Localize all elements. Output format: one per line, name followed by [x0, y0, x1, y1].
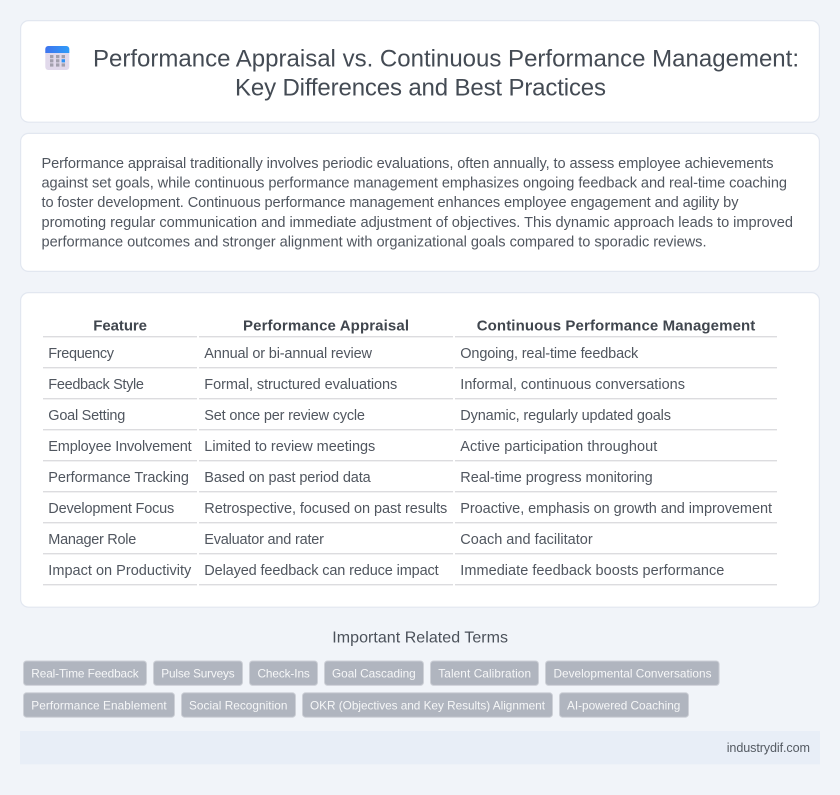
row: Goal Setting: Dynamic, regularly updated goals — [460, 408, 671, 424]
row: Impact on Productivity: Delayed feedback can reduce impact — [204, 563, 439, 579]
tag: AI-powered Coaching: AI-powered Coaching — [567, 698, 680, 712]
row: Performance Tracking: Real-time progress monitoring — [460, 470, 653, 486]
table header row: Continuous Performance Management — [477, 318, 755, 335]
tag: Real-Time Feedback: Real-Time Feedback — [31, 666, 139, 680]
row: Goal Setting: Set once per review cycle — [204, 408, 365, 424]
summary text: performance outcomes and stronger alignment with organizational goals compared to sporadic reviews. — [42, 234, 706, 250]
table header row: Performance Appraisal — [243, 318, 409, 335]
tag: Social Recognition: Social Recognition — [189, 698, 287, 712]
tag: Pulse Surveys — [154, 661, 242, 685]
row: Frequency — [43, 346, 777, 368]
panel: comparison table — [21, 293, 819, 607]
title: Performance Appraisal vs. Continuous Performance Management: — [93, 46, 799, 73]
title: Key Differences and Best Practices — [235, 75, 606, 102]
table header row — [43, 318, 777, 337]
tag: Goal Cascading: Goal Cascading — [332, 666, 416, 680]
row: Manager Role: Evaluator and rater — [204, 532, 324, 548]
tag: Pulse Surveys: Pulse Surveys — [161, 666, 235, 680]
summary text — [42, 156, 793, 250]
summary text: promoting regular communication and immediate adjustment of objectives. This dynamic approach leads to improved — [42, 215, 793, 231]
table header row: Feature — [93, 318, 147, 335]
row: Development Focus: Development Focus — [48, 501, 174, 517]
row: Impact on Productivity: Immediate feedback boosts performance — [460, 563, 724, 579]
tag: Performance Enablement — [24, 693, 174, 717]
row: Frequency: Annual or bi-annual review — [204, 346, 373, 362]
tag: Social Recognition — [182, 693, 296, 717]
row: Manager Role: Coach and facilitator — [460, 532, 593, 548]
row: Development Focus: Proactive, emphasis on growth and improvement — [460, 501, 772, 517]
tag: Talent Calibration — [430, 661, 538, 685]
footer source text: industrydif.com — [727, 741, 810, 755]
panel: summary paragraph — [21, 133, 819, 271]
row: Performance Tracking: Performance Tracking — [48, 470, 189, 486]
footer bar — [20, 731, 820, 764]
row: Impact on Productivity: Impact on Productivity — [48, 563, 192, 579]
icon: calendar — [45, 46, 69, 70]
row: Development Focus — [43, 501, 777, 523]
row: Development Focus: Retrospective, focused on past results — [204, 501, 447, 517]
row: Employee Involvement: Limited to review meetings — [204, 439, 375, 455]
tag: AI-powered Coaching — [560, 693, 688, 717]
summary text: Performance appraisal traditionally involves periodic evaluations, often annually, to assess employee achievements — [42, 156, 774, 172]
row: Goal Setting — [43, 408, 777, 430]
summary text: against set goals, while continuous performance management emphasizes ongoing feedback and real-time coaching — [42, 176, 787, 192]
row: Feedback Style: Feedback Style — [48, 377, 144, 393]
tag: Developmental Conversations: Developmental Conversations — [554, 666, 712, 680]
tag: OKR Alignment — [302, 693, 552, 717]
row: Feedback Style: Informal, continuous conversations — [460, 377, 685, 393]
row: Impact on Productivity — [43, 563, 777, 585]
title — [93, 46, 799, 102]
tag: Real-Time Feedback — [24, 661, 146, 685]
row: Feedback Style: Formal, structured evaluations — [204, 377, 397, 393]
row: Performance Tracking: Based on past period data — [204, 470, 372, 486]
row: Employee Involvement: Active participation throughout — [460, 439, 657, 455]
row: Manager Role: Manager Role — [48, 532, 136, 548]
tag: Goal Cascading — [324, 661, 424, 685]
heading: related terms: Important Related Terms — [332, 630, 508, 647]
tag: Check-Ins: Check-Ins — [258, 666, 310, 680]
row: Manager Role — [43, 532, 777, 554]
row: Goal Setting: Goal Setting — [48, 408, 125, 424]
header panel — [21, 21, 819, 122]
row: Performance Tracking — [43, 470, 777, 492]
tag: Check-Ins — [250, 661, 318, 685]
tag: Talent Calibration: Talent Calibration — [438, 666, 531, 680]
tag: Developmental Conversations — [546, 661, 719, 685]
summary text: to foster development. Continuous performance management enhances employee engagement and agility by — [42, 195, 739, 211]
row: Employee Involvement: Employee Involvement — [48, 439, 192, 455]
row: Employee Involvement — [43, 439, 777, 461]
tag: OKR Alignment: OKR (Objectives and Key Results) Alignment — [310, 698, 546, 712]
row: Feedback Style — [43, 377, 777, 399]
tag: Performance Enablement: Performance Enablement — [31, 698, 167, 712]
related term tags — [24, 661, 719, 717]
row: Frequency: Frequency — [48, 346, 115, 362]
row: Frequency: Ongoing, real-time feedback — [460, 346, 639, 362]
